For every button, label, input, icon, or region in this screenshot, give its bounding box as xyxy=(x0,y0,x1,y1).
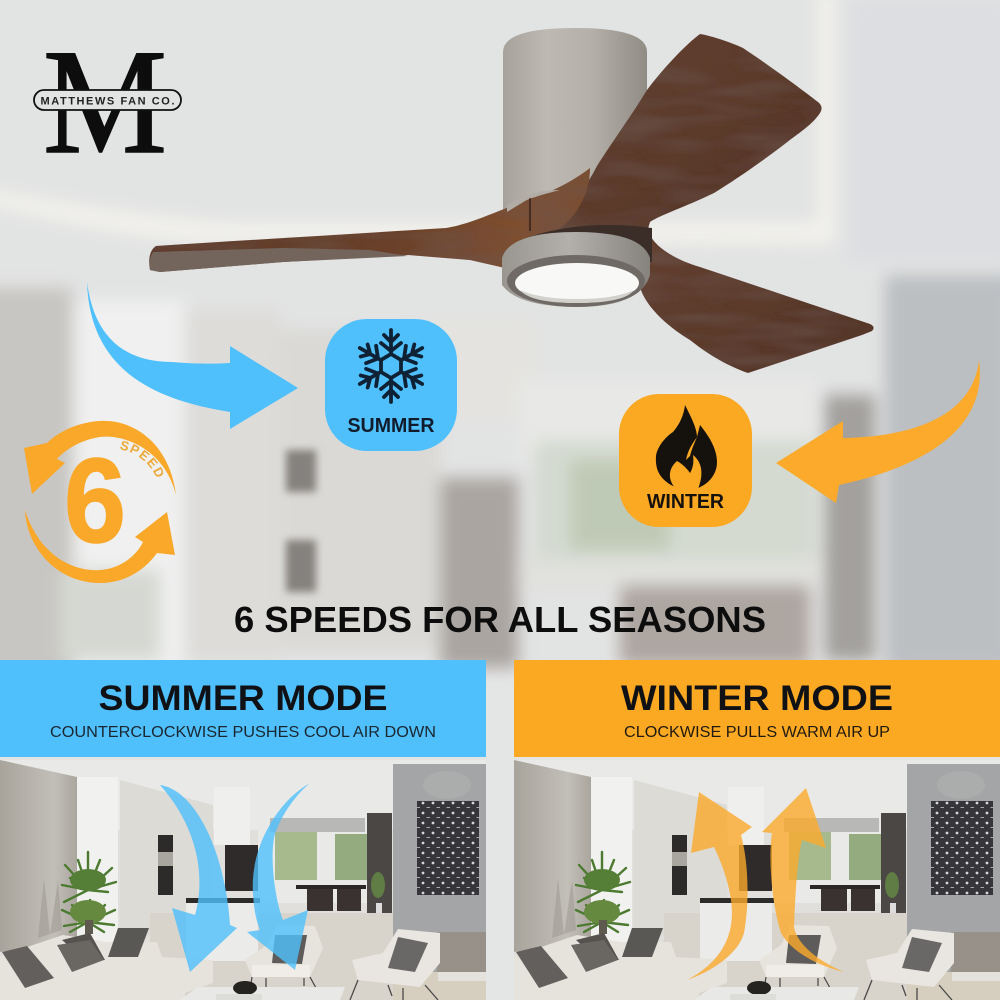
icon tile: winter xyxy=(619,394,752,527)
number 6: 6 xyxy=(64,434,126,568)
winter description: CLOCKWISE PULLS WARM AIR UP xyxy=(624,724,890,741)
winter airflow arrows xyxy=(687,788,844,980)
winter heading: WINTER MODE xyxy=(621,679,893,718)
fan light ring xyxy=(502,232,650,307)
summer airflow arrows xyxy=(160,783,310,972)
arrow: winter orange xyxy=(776,360,980,503)
panel: winter mode xyxy=(514,660,1000,1000)
badge: 6 speed xyxy=(24,420,176,583)
bottom arrow xyxy=(25,510,175,583)
fan blade: upper right xyxy=(545,34,822,248)
fan blade: lower right xyxy=(640,233,874,373)
summer heading: SUMMER MODE xyxy=(98,679,388,718)
winter header bar xyxy=(514,660,1000,757)
icon: flame xyxy=(656,405,717,489)
icon tile: summer xyxy=(325,319,457,451)
fan collar shadow xyxy=(520,225,652,262)
top arrow xyxy=(24,421,176,495)
label: summer: SUMMER xyxy=(348,415,435,437)
summer description: COUNTERCLOCKWISE PUSHES COOL AIR DOWN xyxy=(50,724,436,741)
blade underside xyxy=(150,248,408,272)
winter room photo xyxy=(514,760,1000,1000)
fan blade: left xyxy=(149,168,590,272)
ceiling fan xyxy=(149,28,874,373)
fan canopy xyxy=(503,28,647,250)
arrow: summer blue xyxy=(87,282,298,429)
speed text: SPEED xyxy=(120,441,164,477)
logo: Matthews Fan Co.: MATTHEWS FAN CO. xyxy=(40,96,174,108)
summer room photo xyxy=(0,760,486,1000)
label: winter: WINTER xyxy=(647,491,725,513)
icon: snowflake xyxy=(355,330,427,402)
background: blurred living room xyxy=(0,0,1000,680)
headline: 6 SPEEDS FOR ALL SEASONS xyxy=(234,599,766,640)
logo: Matthews Fan Co.: M xyxy=(43,19,167,185)
canopy lower edge xyxy=(507,190,560,212)
fan light xyxy=(515,263,639,303)
panel: summer mode xyxy=(0,660,486,1000)
summer header bar xyxy=(0,660,486,757)
